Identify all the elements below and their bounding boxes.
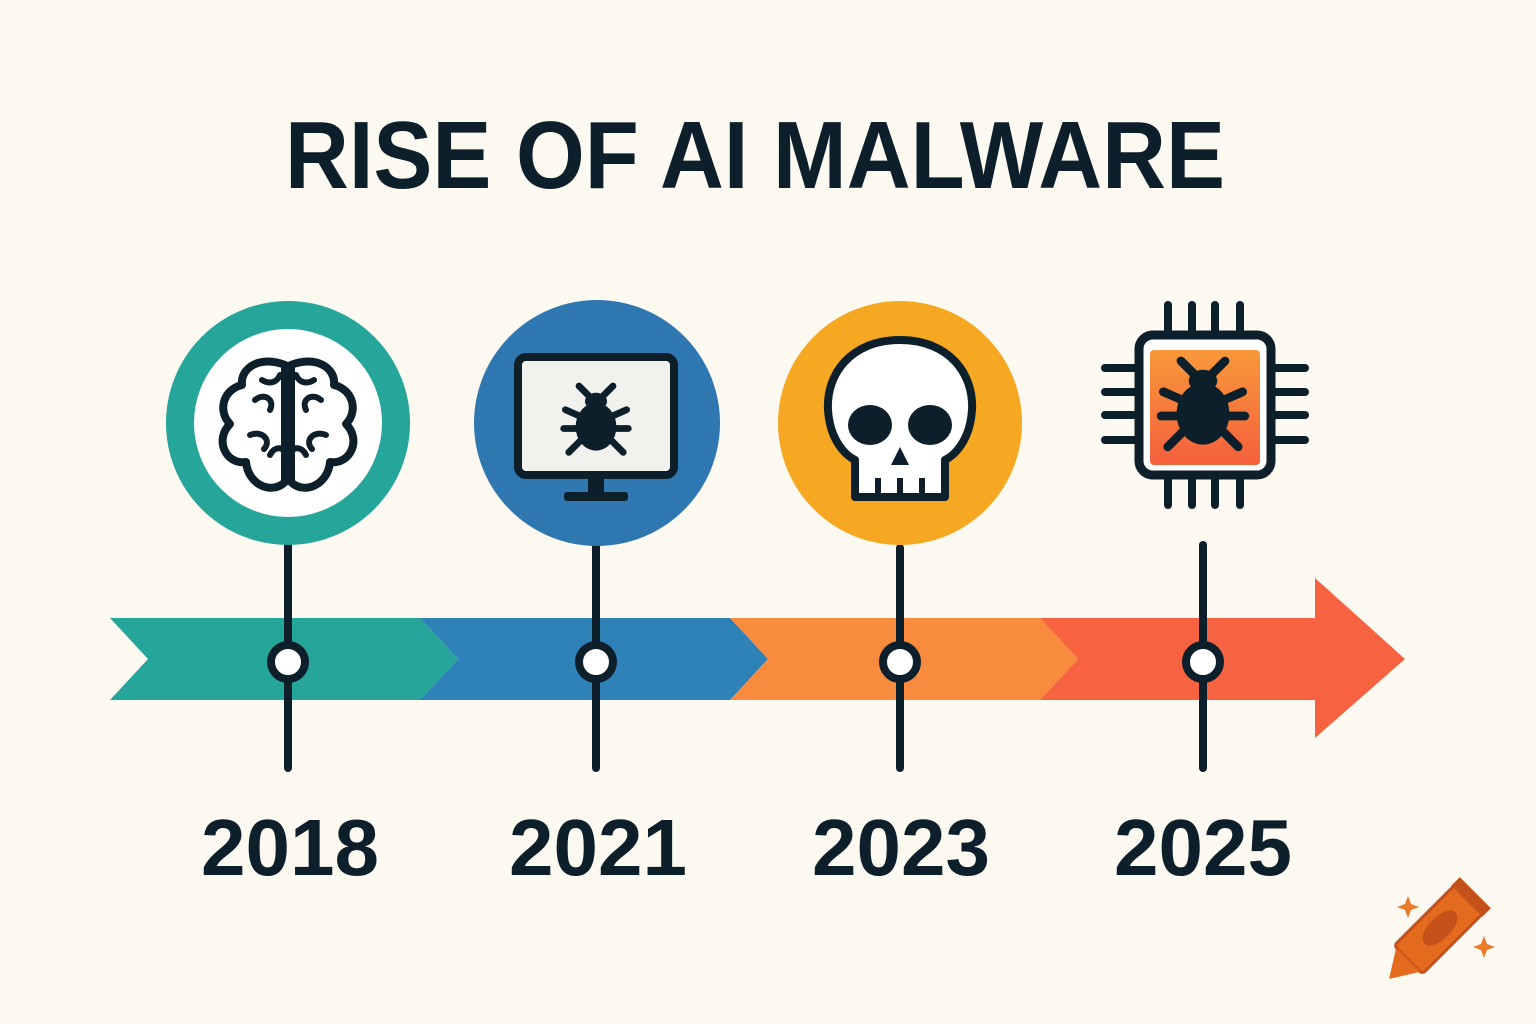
title: RISE OF AI MALWARE (285, 102, 1225, 209)
years (201, 803, 1292, 892)
years: 2025 (1114, 803, 1292, 892)
icon: monitor bug 2021 (474, 300, 720, 546)
years: 2018 (201, 803, 379, 892)
years: 2023 (812, 803, 990, 892)
markers (271, 545, 1220, 768)
icon: crayon logo (1374, 877, 1495, 994)
icon: skull 2023 (778, 301, 1022, 545)
years: 2021 (509, 803, 687, 892)
icon: chip bug 2025 (1105, 305, 1305, 505)
timeline arrow (110, 578, 1405, 738)
icon: brain 2018 (180, 315, 396, 531)
